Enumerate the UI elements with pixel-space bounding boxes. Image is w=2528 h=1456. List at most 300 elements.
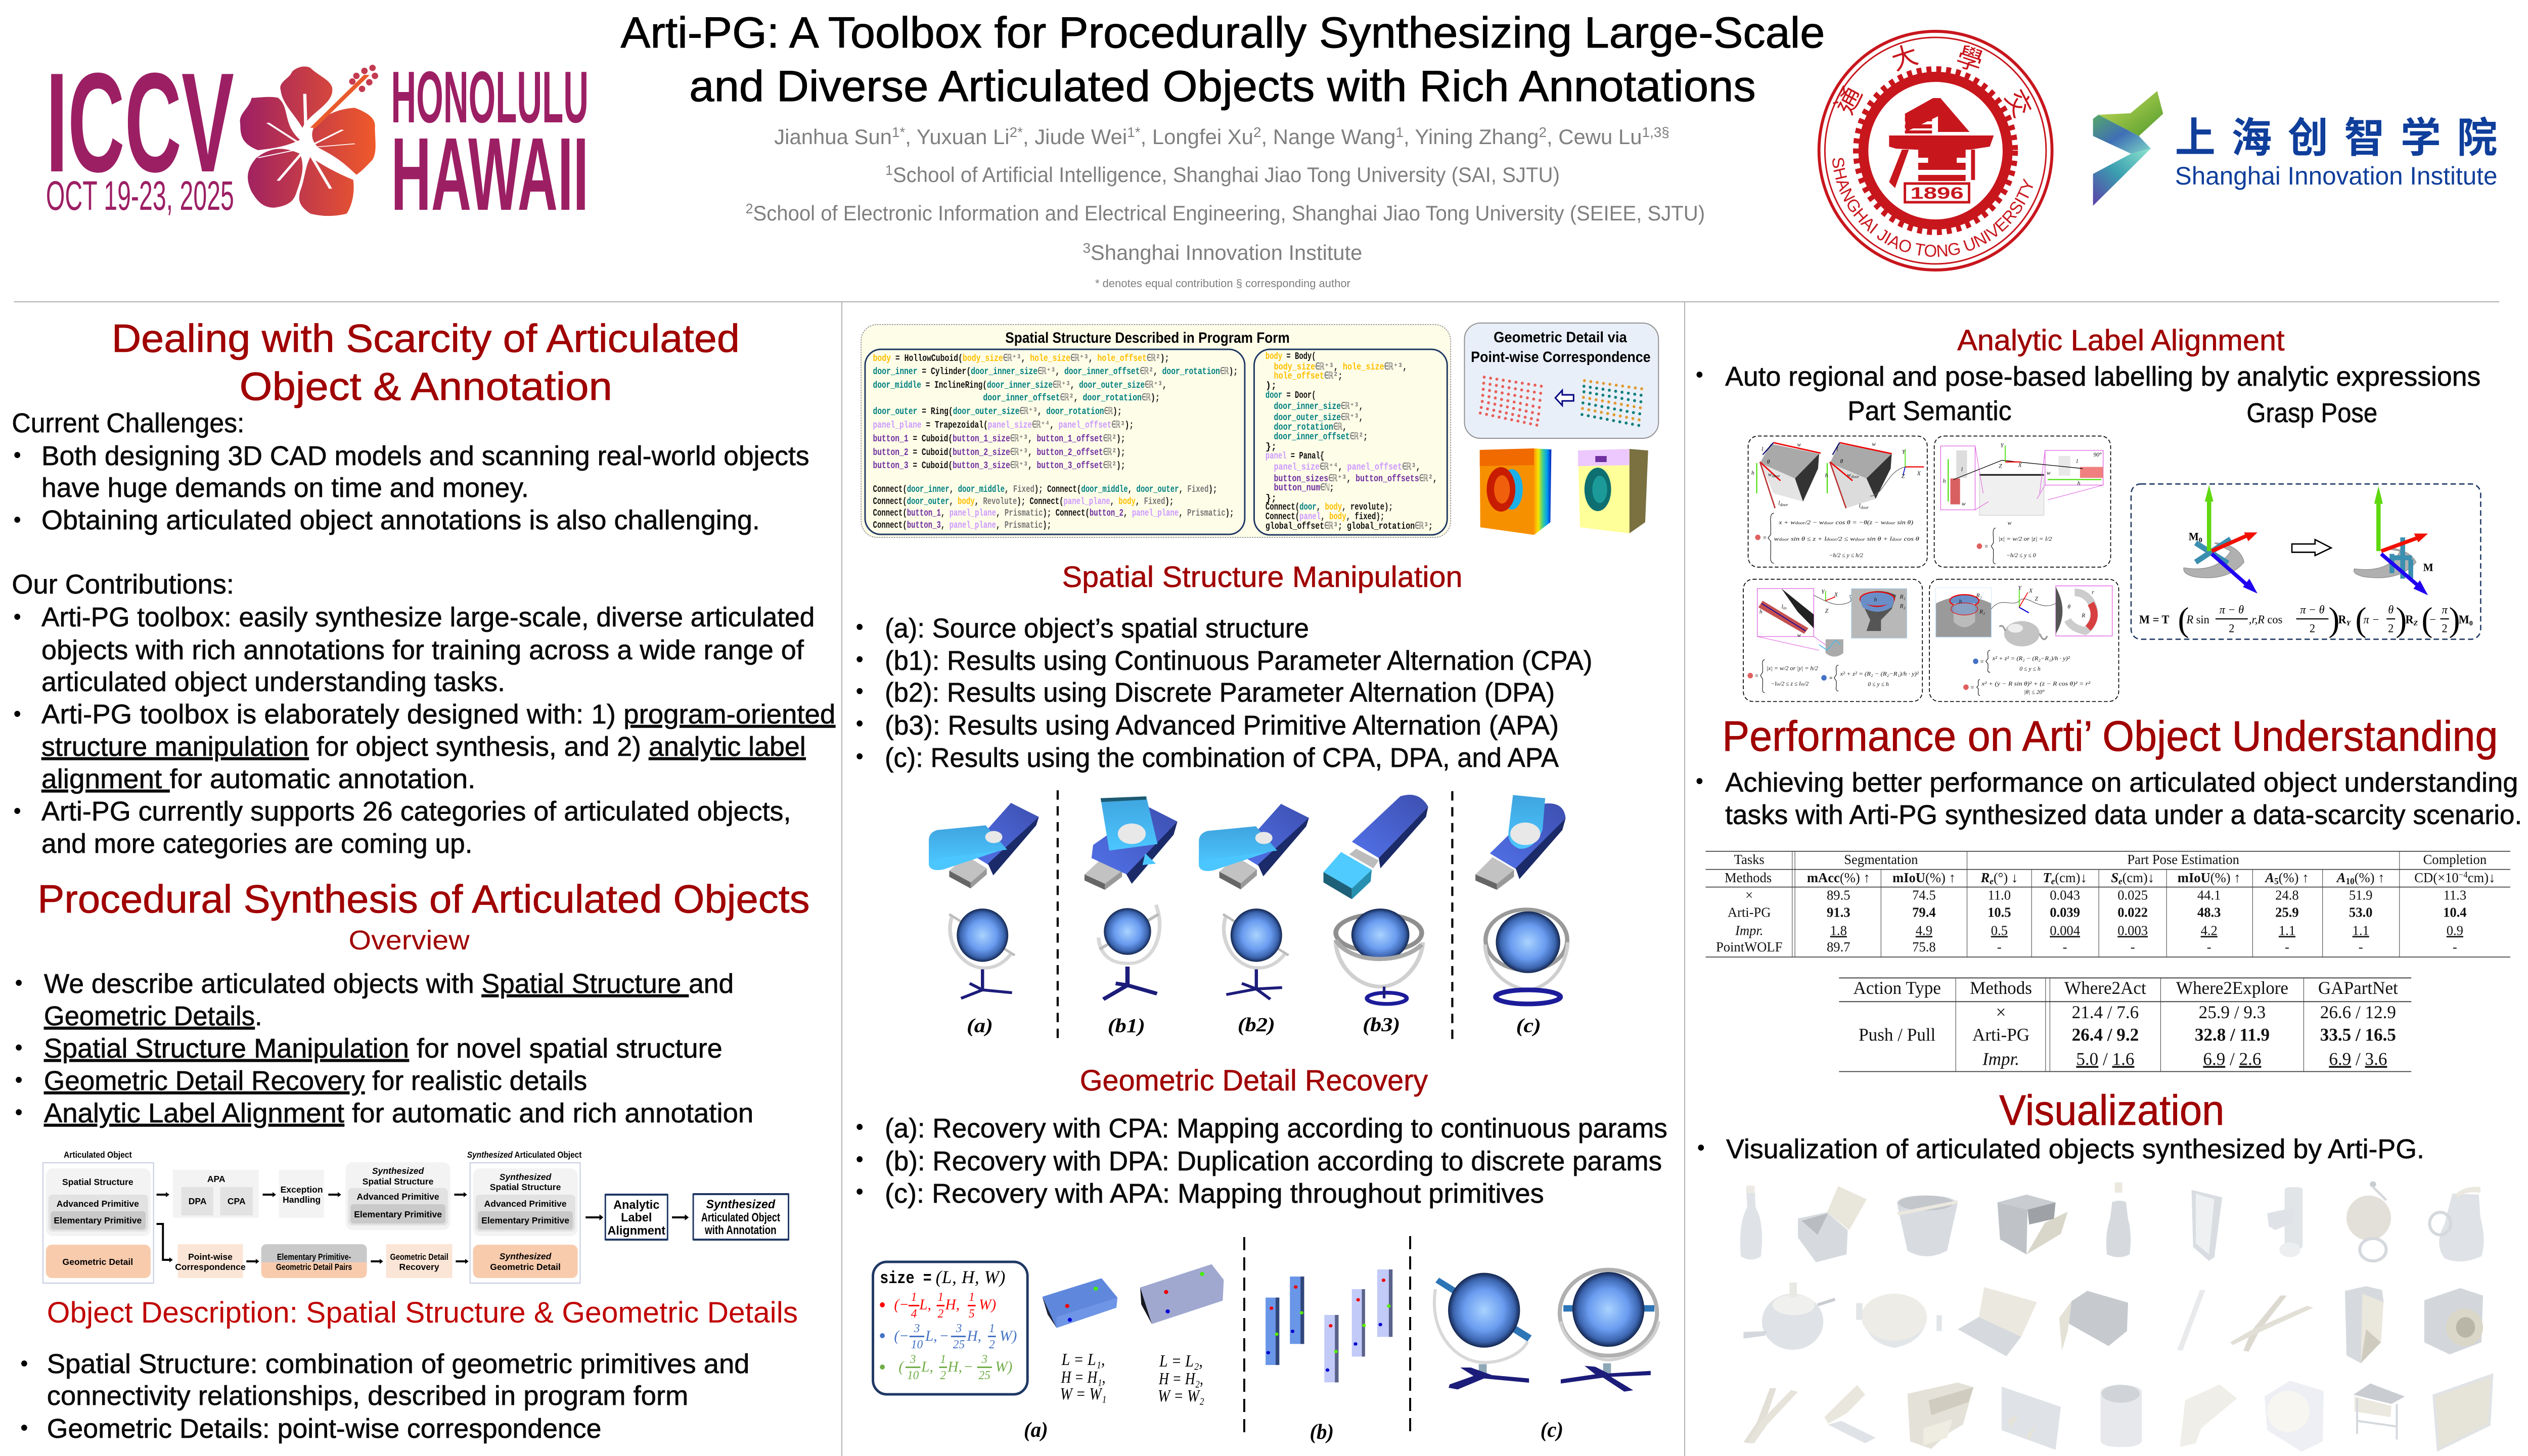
labels: (b1) bbox=[1108, 1015, 1145, 1037]
table: push pull: GAPartNet bbox=[2318, 978, 2398, 998]
code box: left: body = HollowCuboid(body_size∈ℝ⁺³, hole_size∈ℝ⁺³, hole_offset∈ℝ²); bbox=[873, 353, 1169, 364]
text block: overview bullets: Analytic Label Alignment for automatic and rich annotation bbox=[44, 1098, 753, 1128]
text block: manipulation bullets: (b1): Results using Continuous Parameter Alternation (CPA) bbox=[885, 646, 1592, 676]
panel: geometric detail recovery: Geometric Detail bbox=[390, 1252, 448, 1262]
text block: performance bullet: tasks with Arti-PG synthesized data under a data-scarcity scenario. bbox=[1725, 800, 2522, 830]
row 1 objects bbox=[1740, 1181, 2484, 1262]
table: understanding tasks: (°) ↓ bbox=[1994, 870, 2018, 885]
formula: grasp transform: Y bbox=[2346, 620, 2352, 627]
table: understanding tasks: 4.9 bbox=[1916, 923, 1932, 938]
text block: contributions: and more categories are coming up. bbox=[41, 829, 473, 859]
labels: (a) bbox=[967, 1015, 993, 1037]
text block: manipulation bullets: (a): Source object’s spatial structure bbox=[885, 613, 1309, 644]
gallery: synthesized objects bbox=[1740, 1181, 2492, 1451]
panel: duplicated primitives (b) bbox=[1266, 1269, 1392, 1382]
panel: point-wise correspondence: Correspondence bbox=[175, 1262, 246, 1272]
table: understanding tasks: 5 bbox=[2274, 877, 2279, 886]
authors: 1 bbox=[1395, 124, 1404, 140]
table: understanding tasks: 91.3 bbox=[1827, 904, 1850, 920]
panel: synthesized spatial structure: Elementary Primitive bbox=[354, 1209, 442, 1219]
authors: , Yuxuan Li bbox=[905, 125, 1010, 149]
code box: left: Connect(button_3, panel_plane, Prismatic); bbox=[873, 520, 1051, 531]
text block: contributions: Arti-PG currently supports 26 categories of articulated objects, bbox=[41, 796, 791, 827]
panel: size formula: 10 bbox=[911, 1338, 923, 1351]
table: understanding tasks: - bbox=[2359, 939, 2363, 954]
heading: Dealing with Scarcity: Dealing with Scarcity of Articulated bbox=[112, 316, 740, 360]
icon: globe c bbox=[1485, 909, 1568, 1004]
icon: source grasp: 0 bbox=[2199, 537, 2202, 544]
labels: (a) bbox=[1024, 1418, 1048, 1442]
table: understanding tasks: - bbox=[2207, 939, 2211, 954]
logo date: OCT 19-23, 2025 bbox=[46, 173, 234, 219]
panel: mug: R₂ bbox=[1900, 602, 1906, 609]
heading: Dealing with Scarcity: Object & Annotation bbox=[240, 365, 612, 408]
panel: synthesized spatial structure: Spatial Structure bbox=[363, 1176, 434, 1187]
formula: grasp transform: π − θ bbox=[2300, 603, 2325, 616]
panel: cabinet: X bbox=[2018, 461, 2022, 469]
authors: , Jiude Wei bbox=[1023, 125, 1127, 149]
panel: door: l bbox=[1859, 502, 1861, 509]
panel: size formula: H, bbox=[945, 1297, 960, 1313]
authors: , Longfei Xu bbox=[1141, 125, 1253, 149]
table: understanding tasks: CD(×10 bbox=[2414, 870, 2459, 885]
panel: articulated object: Elementary Primitive bbox=[54, 1215, 142, 1225]
formula: grasp transform: 2 bbox=[2388, 622, 2394, 634]
panel: size formula: H, bbox=[947, 1359, 962, 1375]
table: understanding tasks: 0.9 bbox=[2447, 923, 2463, 938]
panel: APA: CPA bbox=[228, 1196, 246, 1206]
table: push pull: × bbox=[1996, 1002, 2006, 1022]
table: understanding tasks: Completion bbox=[2423, 852, 2487, 867]
code box: right: panel_size∈ℝ⁺⁴, panel_offset∈ℝ³, bbox=[1274, 462, 1421, 473]
table: understanding tasks: 0.004 bbox=[2050, 923, 2081, 938]
panel: synthesized articulated object: Elementary Primitive bbox=[481, 1215, 569, 1225]
icon: target grasp bbox=[2354, 486, 2433, 595]
formula: grasp transform: ( bbox=[2178, 601, 2189, 639]
text block: recovery bullets: (b): Recovery with DPA: Duplication according to discrete params bbox=[885, 1146, 1662, 1176]
table: push pull: 6.9 / 3.6 bbox=[2329, 1049, 2387, 1069]
subheading: part semantic: Part Semantic bbox=[1847, 396, 2012, 426]
panel: cabinet: h bbox=[1943, 477, 1946, 484]
panel: size formula: − bbox=[963, 1359, 973, 1375]
logo: Shanghai Jiao Tong University: 大 bbox=[1886, 33, 1922, 78]
table: push pull bbox=[1839, 978, 2411, 1072]
panel: cabinet: w bbox=[2047, 469, 2051, 476]
panel: size formula: W) bbox=[1000, 1328, 1017, 1344]
text block: performance bullet: Achieving better performance on articulated object understanding bbox=[1725, 767, 2518, 798]
figure: geometric detail recovery bbox=[873, 1236, 1659, 1444]
table: understanding tasks: e bbox=[2051, 877, 2055, 886]
code box: left: door_inner_offset∈ℝ², door_rotation∈ℝ); bbox=[983, 392, 1160, 403]
panel: size formula: ( bbox=[898, 1359, 905, 1375]
affiliations: 2 bbox=[746, 201, 753, 216]
code box: right: door = Door( bbox=[1266, 390, 1316, 401]
code box: right: global_offset∈ℝ³; global_rotation∈ℝ³; bbox=[1266, 521, 1433, 532]
logo text: ICCV: ICCV bbox=[46, 43, 235, 202]
table: understanding tasks: 74.5 bbox=[1912, 887, 1936, 903]
table: understanding tasks: 4.2 bbox=[2201, 923, 2218, 938]
table: understanding tasks: 24.8 bbox=[2275, 887, 2299, 903]
table: understanding tasks: 25.9 bbox=[2275, 904, 2299, 920]
icon: globe a bbox=[949, 908, 1015, 998]
panel: cabinet: l bbox=[1961, 466, 1963, 473]
panel: primitive-detail pairs: Geometric Detail Pairs bbox=[276, 1262, 352, 1272]
icon: source grasp bbox=[2184, 485, 2258, 594]
panel: mug: h bbox=[1874, 596, 1877, 603]
table: understanding tasks: 0.025 bbox=[2117, 887, 2148, 903]
panel: door bbox=[1748, 436, 1927, 567]
table: understanding tasks: A bbox=[2336, 870, 2346, 885]
heading: geometric detail recovery: Geometric Detail Recovery bbox=[1080, 1064, 1428, 1097]
formula: grasp transform: − bbox=[2429, 613, 2436, 626]
panel: teapot: h bbox=[1959, 598, 1962, 605]
panel title bbox=[1471, 329, 1651, 366]
panel: synthesized articulated object bbox=[467, 1150, 581, 1283]
panel: articulated object bbox=[43, 1150, 154, 1283]
heading: Dealing with Scarcity bbox=[112, 316, 740, 408]
heading: spatial structure manipulation: Spatial Structure Manipulation bbox=[1062, 561, 1463, 594]
panel: articulated object: Advanced Primitive bbox=[57, 1199, 139, 1209]
panel: teapot: R₁ bbox=[1976, 592, 1982, 599]
logo: Shanghai Jiao Tong University: 學 bbox=[1953, 34, 1989, 79]
table: understanding tasks: mIoU(%) ↑ bbox=[2178, 870, 2241, 885]
code box: left bbox=[865, 349, 1245, 534]
table: understanding tasks: Arti-PG bbox=[1728, 904, 1771, 920]
table: understanding tasks: - bbox=[2285, 939, 2289, 954]
authors: , Cewu Lu bbox=[1547, 125, 1642, 149]
panel: analytic label alignment: Analytic bbox=[613, 1199, 659, 1212]
code box: left: button_2 = Cuboid(button_2_size∈ℝ⁺³, button_2_offset∈ℝ²); bbox=[873, 447, 1125, 458]
formula: grasp transform: ) bbox=[2449, 601, 2460, 639]
panel: size formula: W) bbox=[979, 1297, 996, 1313]
logo: Shanghai Jiao Tong University bbox=[1817, 30, 2054, 271]
panel: door: Y bbox=[1902, 448, 1906, 455]
table: understanding tasks: Part Pose Estimation bbox=[2127, 852, 2239, 867]
panel: door: w bbox=[1797, 441, 1801, 448]
panel: synthesized articulated object: Synthesized Articulated Object bbox=[467, 1150, 581, 1160]
text block: contributions: alignment for automatic annotation. bbox=[41, 764, 475, 794]
authors: Jianhua Sun bbox=[774, 125, 889, 149]
table: understanding tasks: - bbox=[2063, 939, 2067, 954]
text block: overview bullets: We describe articulated objects with Spatial Structure and bbox=[44, 969, 734, 999]
code box: left: Connect(button_1, panel_plane, Prismatic); Connect(button_2, panel_plane, Prismatic); bbox=[873, 508, 1234, 519]
formula: grasp transform: ) bbox=[2328, 601, 2339, 639]
text block: current challenges: Current Challenges: bbox=[12, 408, 244, 438]
heading: visualization: Visualization bbox=[1999, 1086, 2224, 1134]
panel: size formula: 1 bbox=[969, 1291, 975, 1304]
panel: mug: R₁ bbox=[1900, 593, 1906, 600]
panel: size formula bbox=[873, 1262, 1027, 1394]
panel: exception handling: Handling bbox=[283, 1195, 321, 1205]
formula: grasp transform: M = T bbox=[2139, 613, 2169, 626]
panel: synthesized articulated object: Geometric Detail bbox=[490, 1262, 561, 1272]
panel: door: l bbox=[1762, 445, 1764, 452]
formula: grasp transform: Z bbox=[2413, 620, 2418, 627]
text block: object description bullets: Geometric Details: point-wise correspondence bbox=[47, 1414, 601, 1444]
panel: size formula: 2 bbox=[989, 1338, 995, 1351]
table: understanding tasks: A bbox=[2264, 870, 2274, 885]
panel: teapot: θ bbox=[2067, 603, 2070, 610]
code box: right: }; bbox=[1266, 441, 1277, 452]
panel: mug: ≡ bbox=[1829, 674, 1833, 681]
panel: primitive (a): W = W₁ bbox=[1060, 1385, 1106, 1403]
panel: teapot: R₂ bbox=[1979, 608, 1985, 615]
table: understanding tasks: mIoU(%) ↑ bbox=[1892, 870, 1956, 885]
logo: Shanghai Innovation Institute bbox=[2093, 91, 2497, 206]
table: understanding tasks: 79.4 bbox=[1912, 904, 1936, 920]
authors: 2* bbox=[1010, 124, 1023, 140]
formula: grasp transform: 2 bbox=[2442, 622, 2448, 634]
panel: teapot bbox=[1929, 579, 2118, 702]
code box: right: hole_offset∈ℝ²; bbox=[1274, 371, 1342, 382]
text block: contributions: structure manipulation for object synthesis, and 2) analytic label bbox=[41, 732, 806, 762]
panel: door: l bbox=[1778, 499, 1780, 507]
affiliations: School of Artificial Intelligence, Shanghai Jiao Tong University (SAI, SJTU) bbox=[893, 163, 1560, 187]
table: understanding tasks: PointWOLF bbox=[1716, 939, 1782, 954]
panel: cabinet: |x| = w/2 or |z| = l/2 bbox=[1998, 535, 2052, 542]
panel: teapot: X bbox=[2028, 587, 2033, 594]
authors: , Nange Wang bbox=[1261, 125, 1395, 149]
table: understanding tasks: Tasks bbox=[1734, 852, 1765, 867]
panel: size formula: 3 bbox=[914, 1322, 920, 1335]
formula: grasp transform: 2 bbox=[2229, 622, 2234, 634]
text block: recovery bullets: (a): Recovery with CPA: Mapping according to continuous params bbox=[885, 1113, 1667, 1144]
panel: mug: −lin/2 ≤ z ≤ lin/2 bbox=[1771, 680, 1809, 687]
panel: mug: h bbox=[1759, 608, 1763, 615]
panel: size formula: 2 bbox=[937, 1307, 943, 1321]
table: understanding tasks: 11.3 bbox=[2444, 887, 2466, 903]
panel: cabinet: w bbox=[1962, 500, 1966, 507]
code box: left: door_inner = Cylinder(door_inner_size∈ℝ⁺³, door_inner_offset∈ℝ², door_rotation∈ℝ); bbox=[873, 366, 1238, 377]
text block: recovery bullets: (c): Recovery with APA: Mapping throughout primitives bbox=[885, 1178, 1544, 1209]
panel: synthesized output: Articulated Object bbox=[701, 1211, 780, 1224]
panel title: Geometric Detail via bbox=[1494, 329, 1627, 346]
panel: teapot: Y bbox=[2018, 584, 2022, 591]
point grid: source bbox=[1480, 377, 1545, 426]
formula: grasp transform: ) bbox=[2396, 601, 2407, 639]
panel: point-wise correspondence: Point-wise bbox=[188, 1252, 233, 1262]
table: understanding tasks: Impr. bbox=[1735, 923, 1763, 938]
authors: , Yining Zhang bbox=[1404, 125, 1539, 149]
formula: grasp transform: ,r,R cos bbox=[2249, 613, 2282, 626]
panel: door: h bbox=[1825, 472, 1828, 479]
icon: USB b1 bbox=[1085, 796, 1178, 890]
table: understanding tasks: e bbox=[1990, 877, 1994, 886]
panel: cabinet: h bbox=[2078, 479, 2081, 487]
icon: hibiscus flower bbox=[240, 65, 378, 216]
table: understanding tasks: (cm)↓ bbox=[2123, 870, 2154, 885]
table: understanding tasks: 48.3 bbox=[2197, 904, 2221, 920]
code box: right: button_sizes∈ℝ⁺³, button_offsets∈ℝ², bbox=[1274, 473, 1437, 484]
table: push pull: 26.6 / 12.9 bbox=[2320, 1002, 2396, 1022]
code box: left: panel_plane = Trapezoidal(panel_size∈ℝ⁺⁴, panel_offset∈ℝ³); bbox=[873, 420, 1134, 431]
text block: manipulation bullets: (b2): Results using Discrete Parameter Alternation (DPA) bbox=[885, 677, 1555, 708]
table: understanding tasks: - bbox=[1997, 939, 2002, 954]
code box: right: body = Body( bbox=[1266, 351, 1316, 362]
table: understanding tasks: e bbox=[2118, 877, 2123, 886]
table: understanding tasks: 89.5 bbox=[1827, 887, 1850, 903]
authors: 1* bbox=[892, 124, 906, 140]
table: understanding tasks: 51.9 bbox=[2349, 887, 2372, 903]
code box: right: door_inner_size∈ℝ⁺³, bbox=[1274, 401, 1363, 412]
panel: door: l bbox=[1836, 445, 1838, 452]
panel: cabinet: l bbox=[2076, 458, 2078, 465]
panel: size formula: W) bbox=[995, 1359, 1012, 1375]
panel: size formula: 10 bbox=[907, 1369, 919, 1382]
figure: analytic panels bbox=[1743, 436, 2480, 702]
table: understanding tasks: × bbox=[1745, 887, 1753, 903]
table: understanding tasks: (%) ↑ bbox=[2279, 870, 2309, 885]
labels: (b3) bbox=[1363, 1014, 1400, 1036]
icon: globe b3 bbox=[1336, 908, 1423, 1004]
authors: 2 bbox=[1539, 124, 1547, 140]
panel: primitive mapping (c) bbox=[1434, 1270, 1659, 1392]
table: understanding tasks: 44.1 bbox=[2197, 887, 2221, 903]
formula: grasp transform: θ bbox=[2388, 603, 2394, 616]
text block: object description bullets: connectivity relationships, described in program form bbox=[47, 1381, 688, 1411]
table: push pull: Action Type bbox=[1854, 978, 1941, 998]
logo: ICCV Honolulu Hawaii bbox=[46, 43, 589, 232]
table: push pull: Methods bbox=[1970, 978, 2032, 998]
panel: size formula: 3 bbox=[956, 1322, 962, 1335]
panel: teapot: r bbox=[2092, 588, 2094, 596]
panel: cabinet: ≡ bbox=[1984, 543, 1988, 550]
panel: size formula: 5 bbox=[969, 1307, 975, 1321]
panel: articulated object: Articulated Object bbox=[64, 1150, 132, 1160]
code box: right: Connect(panel, body, fixed); bbox=[1266, 511, 1384, 522]
panel: synthesized output bbox=[693, 1193, 789, 1241]
panel: cabinet: 90° bbox=[2093, 451, 2102, 458]
table: understanding tasks: 0.039 bbox=[2050, 904, 2080, 920]
panel: synthesized articulated object: Synthesized bbox=[500, 1172, 552, 1182]
authors: 1* bbox=[1127, 124, 1141, 140]
text block: overview bullets bbox=[16, 969, 753, 1128]
formula: grasp transform: ( bbox=[2356, 601, 2367, 639]
code box: left: button_3 = Cuboid(button_3_size∈ℝ⁺³, button_3_offset∈ℝ²); bbox=[873, 460, 1125, 471]
table: understanding tasks: S bbox=[2111, 870, 2118, 885]
code box: right: Connect(door, body, revolute); bbox=[1266, 502, 1393, 513]
panel: door: X bbox=[1917, 470, 1921, 477]
panel: door: θ bbox=[1767, 458, 1770, 465]
code box: right: door_outer_size∈ℝ⁺³, bbox=[1274, 412, 1363, 423]
code box: right bbox=[1254, 349, 1447, 535]
table: push pull: Impr. bbox=[1982, 1049, 2019, 1069]
text block: contributions: Arti-PG toolbox is elaborately designed with: 1) program-oriented bbox=[41, 699, 835, 730]
title bbox=[621, 9, 1825, 111]
panel: size formula: 25 bbox=[953, 1338, 965, 1351]
code box: right: button_num∈ℕ; bbox=[1274, 482, 1334, 493]
icon: globe b1 bbox=[1099, 905, 1160, 999]
text block: current challenges bbox=[12, 408, 809, 535]
table: push pull: 5.0 / 1.6 bbox=[2076, 1049, 2134, 1069]
text block: current challenges: have huge demands on time and money. bbox=[41, 473, 529, 503]
table: understanding tasks: Methods bbox=[1725, 870, 1772, 885]
text block: overview bullets: Geometric Details. bbox=[44, 1001, 262, 1031]
panel: APA: APA bbox=[207, 1174, 225, 1184]
text block: performance bullet bbox=[1696, 767, 2522, 830]
panel: primitive (a): H = H₂, bbox=[1158, 1370, 1203, 1388]
figure: spatial manipulation results bbox=[929, 790, 1568, 1040]
labels: (c) bbox=[1516, 1015, 1541, 1037]
subheading: Overview: Overview bbox=[348, 925, 470, 956]
formula: grasp transform: R sin bbox=[2186, 613, 2209, 626]
table: push pull: Arti-PG bbox=[1972, 1024, 2029, 1045]
table: understanding tasks: 0.022 bbox=[2117, 904, 2148, 920]
heading: analytic label alignment: Analytic Label Alignment bbox=[1957, 324, 2285, 357]
panel: primitive-detail pairs bbox=[261, 1244, 367, 1278]
panel: cabinet: −h/2 ≤ y ≤ 0 bbox=[2006, 552, 2036, 559]
table: understanding tasks: 89.7 bbox=[1827, 939, 1850, 954]
panel: door: h bbox=[1751, 469, 1754, 476]
panel: size formula: (− bbox=[894, 1328, 909, 1344]
affiliations bbox=[746, 162, 1705, 264]
panel: cabinet: w bbox=[2008, 519, 2012, 526]
title: and Diverse Articulated Objects with Rich Annotations bbox=[689, 62, 1756, 111]
text: HONOLULU bbox=[391, 56, 589, 138]
panel: analytic label alignment bbox=[605, 1194, 667, 1241]
panel: teapot: |θ| ≤ 20° bbox=[2024, 688, 2045, 695]
panel: geometric detail recovery: Recovery bbox=[399, 1262, 439, 1272]
logo: Shanghai Jiao Tong University: 通 bbox=[1824, 78, 1869, 120]
table: understanding tasks: 1.1 bbox=[2279, 923, 2295, 938]
authors: 2 bbox=[1253, 124, 1261, 140]
table: push pull: 6.9 / 2.6 bbox=[2203, 1049, 2261, 1069]
icon: target washer bbox=[1578, 449, 1648, 533]
panel: APA: DPA bbox=[189, 1196, 207, 1206]
title: Arti-PG: A Toolbox for Procedurally Synthesizing Large-Scale bbox=[621, 9, 1825, 57]
panel: mug bbox=[1743, 579, 1922, 702]
panel: door: door bbox=[1861, 505, 1869, 510]
text block: contributions: objects with rich annotations for training across a wide range of bbox=[41, 635, 804, 665]
panel: size formula: 1 bbox=[911, 1291, 917, 1304]
icon: USB b3 bbox=[1324, 795, 1428, 899]
panel: synthesized spatial structure: Advanced Primitive bbox=[357, 1192, 439, 1202]
panel: size formula: − bbox=[939, 1328, 949, 1344]
text block: current challenges: Both designing 3D CAD models and scanning real-world objects bbox=[41, 441, 809, 471]
panel: mug: |x| = w/2 or |y| = h/2 bbox=[1767, 664, 1818, 672]
text block: overview bullets: Spatial Structure Manipulation for novel spatial structure bbox=[44, 1033, 723, 1064]
text block: manipulation bullets: (b3): Results using Advanced Primitive Alternation (APA) bbox=[885, 710, 1559, 741]
panel: synthesized articulated object: Spatial Structure bbox=[490, 1182, 561, 1192]
table: understanding tasks: 75.8 bbox=[1912, 939, 1936, 954]
table: push pull: Where2Explore bbox=[2176, 978, 2288, 998]
formula: grasp transform: R bbox=[2338, 613, 2346, 626]
panel: cabinet bbox=[1934, 436, 2111, 567]
table: understanding tasks: 53.0 bbox=[2349, 904, 2372, 920]
logo: Shanghai Jiao Tong University: 1896 bbox=[1910, 184, 1964, 202]
table: understanding tasks: 0.5 bbox=[1991, 923, 2008, 938]
text block: visualization bullet: Visualization of articulated objects synthesized by Arti-PG. bbox=[1726, 1134, 2424, 1164]
panel: exception handling bbox=[279, 1170, 324, 1218]
code box: left: Connect(door_outer, body, Revolute); Connect(panel_plane, body, Fixed); bbox=[873, 496, 1173, 507]
panel: size formula: (L, H, W) bbox=[936, 1267, 1005, 1287]
panel: door: Z bbox=[1902, 472, 1905, 479]
table: push pull: 26.4 / 9.2 bbox=[2072, 1024, 2139, 1045]
panel: size formula: (− bbox=[894, 1297, 909, 1313]
panel: geometric detail recovery bbox=[386, 1244, 453, 1278]
text block: contributions: articulated object understanding tasks. bbox=[41, 667, 505, 697]
affiliations: 3 bbox=[1083, 240, 1091, 256]
formula: grasp transform: ( bbox=[2421, 601, 2432, 639]
labels: (b) bbox=[1310, 1420, 1334, 1444]
code box: right: body_size∈ℝ⁺³, hole_size∈ℝ⁺³, bbox=[1274, 361, 1407, 373]
panel: mug: Z bbox=[1825, 607, 1829, 614]
panel: size formula: 1 bbox=[989, 1322, 995, 1335]
formula: grasp transform: 2 bbox=[2310, 622, 2315, 634]
panel: mug: ≡ bbox=[1754, 672, 1758, 679]
text block: manipulation bullets bbox=[856, 613, 1592, 773]
labels: (b2) bbox=[1238, 1014, 1275, 1036]
